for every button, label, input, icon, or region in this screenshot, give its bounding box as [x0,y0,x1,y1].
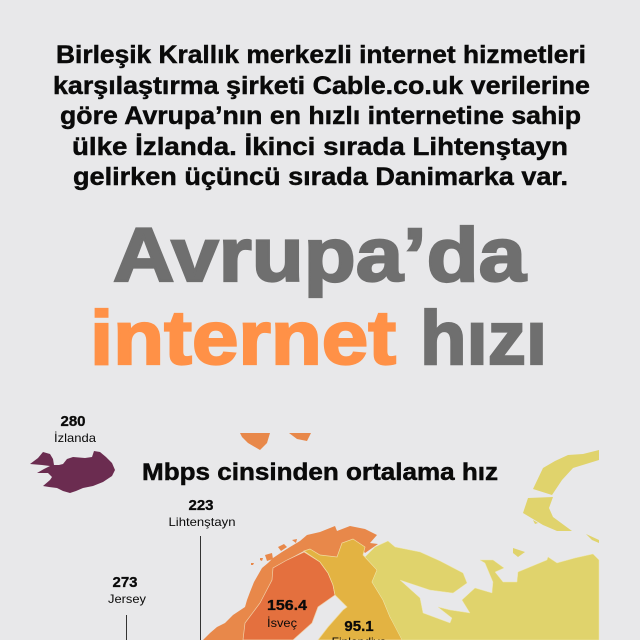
label: Liechtenstein: Lihtenştayn [168,515,236,529]
chart heading: Mbps cinsinden ortalama hız [142,459,498,486]
leader line: Liechtenstein [200,536,202,640]
label: Sweden: 156.4 [267,597,308,614]
region: Sweden [243,552,335,640]
intro text block: karşılaştırma şirketi Cable.co.uk verilerine [53,72,590,100]
leader line: Jersey [126,615,128,640]
region: Finland [304,539,402,640]
islands: Arctic Russia [513,520,599,557]
intro text block [53,41,590,191]
label: Liechtenstein [168,497,236,529]
intro text block: ülke İzlanda. İkinci sırada Lihtenştayn [72,133,568,161]
label: Finland [332,618,387,640]
intro text block: Birleşik Krallık merkezli internet hizmetleri [56,41,586,69]
label: Iceland: 280 [60,413,86,430]
region: Russia [365,541,599,640]
region: Novaya Zemlya [523,450,599,531]
label: Iceland [54,413,96,445]
label: Liechtenstein: 223 [188,497,214,514]
map [30,433,599,640]
region: Iceland [30,451,115,493]
label: Iceland: İzlanda [54,431,96,445]
main title [90,213,547,381]
label: Sweden [267,597,308,630]
islands: Norwegian coast [221,539,297,630]
label: Jersey [108,574,146,606]
label: Jersey: Jersey [108,592,146,606]
region: Norway [203,526,378,640]
main title: Avrupa’da [113,213,527,298]
intro text block: gelirken üçüncü sırada Danimarka var. [73,163,568,191]
label: Jersey: 273 [112,574,138,591]
main title: internet [90,296,396,381]
main title: hızı [420,296,547,381]
label: Finland: 95.1 [344,618,374,635]
region: Svalbard [240,433,311,450]
intro text block: göre Avrupa’nın en hızlı internetine sahip [60,102,581,130]
label: Sweden: İsveç [267,616,297,630]
